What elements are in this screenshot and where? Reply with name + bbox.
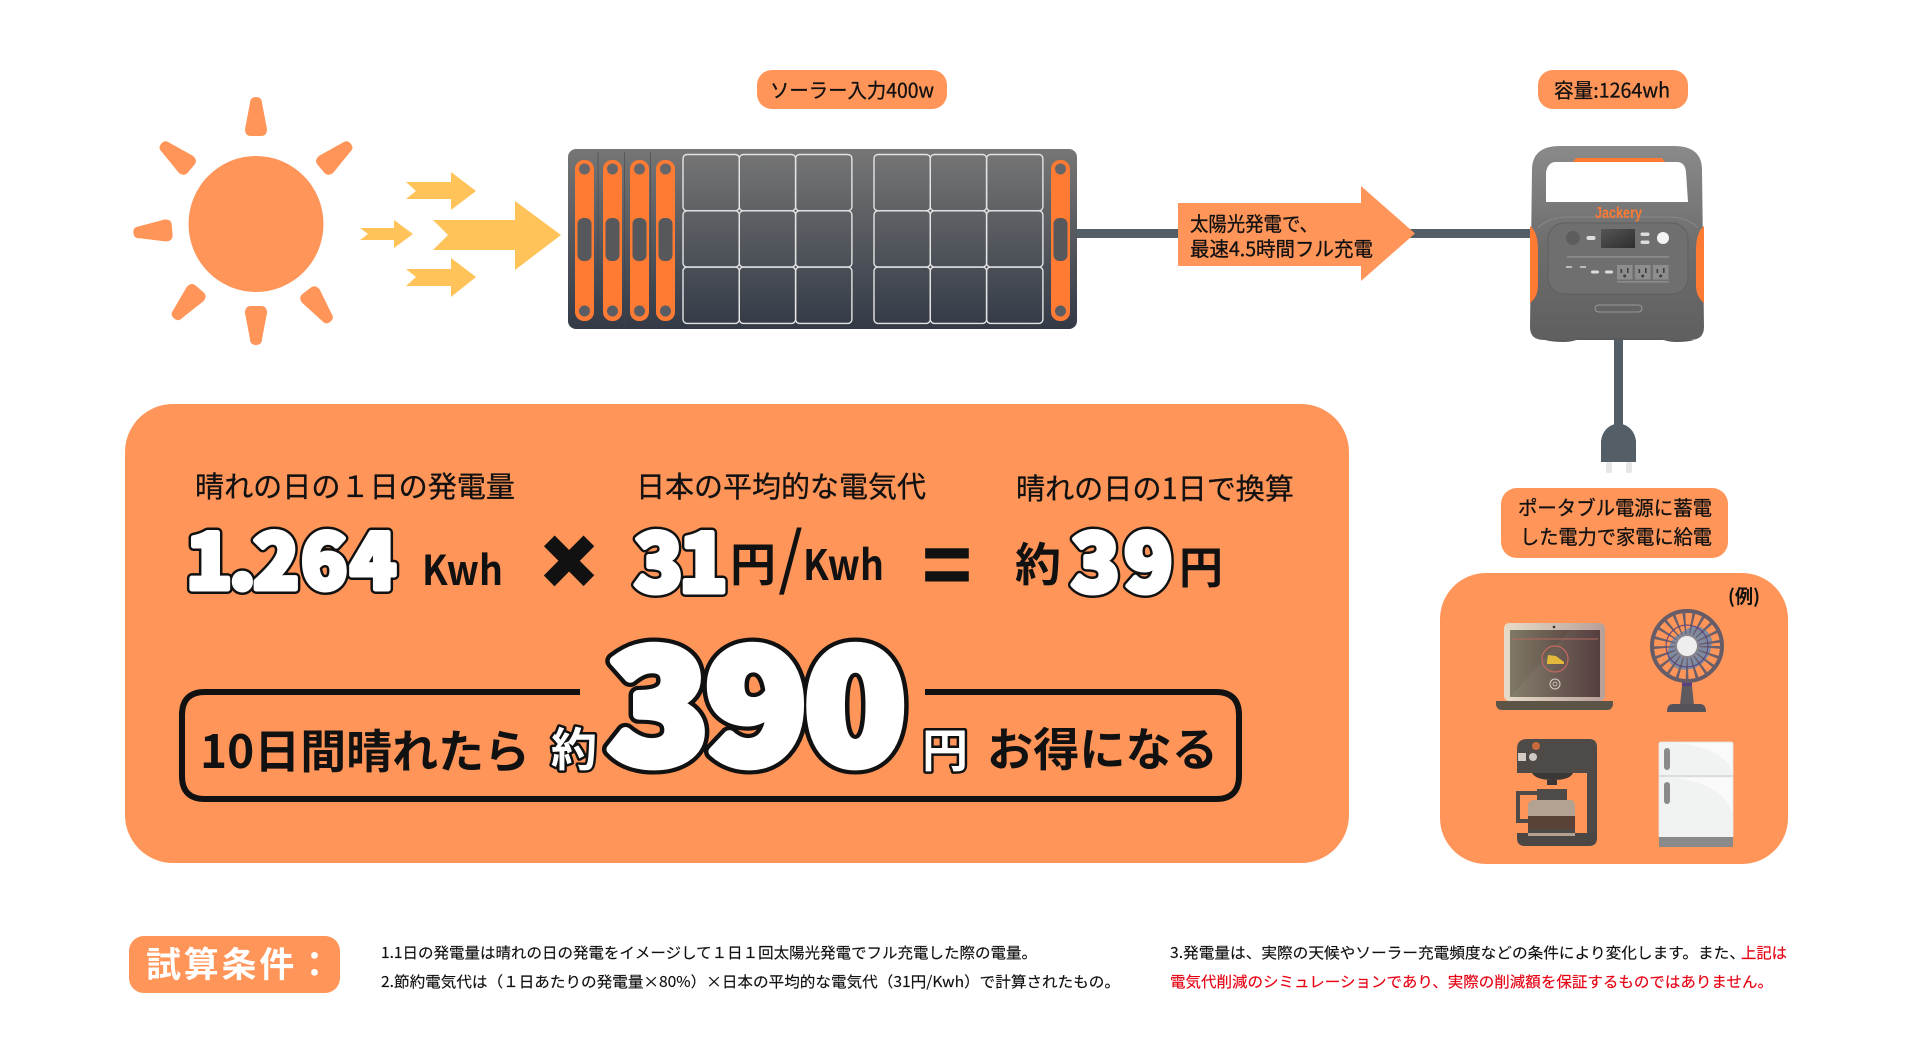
value: 31 yen per Kwh: /	[779, 503, 802, 602]
value: 31 yen per Kwh	[634, 500, 884, 616]
value: 1.264 Kwh: 4	[350, 501, 396, 611]
cord and plug	[1601, 335, 1636, 473]
result value: about 390 yen: 3	[608, 585, 708, 807]
value: about 39 yen: 約	[1015, 529, 1061, 595]
operator: equals: =	[922, 517, 972, 612]
icon: sun	[133, 97, 358, 345]
value: 1.264 Kwh: 1	[186, 501, 232, 611]
result value: about 390 yen	[551, 585, 968, 807]
operator: multiply: ×	[544, 513, 594, 607]
value: about 39 yen: 9	[1124, 500, 1173, 616]
note: example: (例)	[1728, 582, 1760, 609]
label: capacity: 容量:1264wh	[1554, 74, 1670, 104]
notes: left column	[381, 942, 1120, 992]
label: capacity	[1538, 70, 1688, 109]
result value: about 390 yen: 0	[805, 585, 905, 807]
value: 1.264 Kwh: 6	[301, 501, 347, 611]
value: 1.264 Kwh: .	[229, 501, 256, 611]
value: 1.264 Kwh: 2	[253, 501, 299, 611]
value: about 39 yen	[1015, 500, 1223, 616]
value: 1.264 Kwh: 1	[186, 501, 232, 611]
result value: about 390 yen: 約	[551, 714, 597, 780]
value: 1.264 Kwh: .	[229, 501, 256, 611]
arrow callout: charging time: 太陽光発電で、	[1190, 208, 1318, 237]
label: solar input	[757, 70, 947, 109]
icon: coffee maker	[1517, 739, 1597, 846]
label: supply to appliances	[1501, 488, 1728, 558]
panel: calculation	[125, 404, 1349, 863]
value: 31 yen per Kwh: 1	[679, 500, 728, 616]
notes: right column: 上記は	[1741, 942, 1787, 963]
label: solar input: ソーラー入力400w	[770, 74, 934, 104]
notes: left column: 1.1日の発電量は晴れの日の発電をイメージして１日１回太陽光発電でフル充電した際の電量。	[381, 942, 1037, 963]
value: 1.264 Kwh: Kwh	[422, 537, 503, 597]
label: calculation conditions: 試算条件：	[146, 937, 332, 988]
value: about 39 yen: 3	[1071, 500, 1120, 616]
result value: about 390 yen: 3	[608, 585, 708, 807]
result value: about 390 yen: 9	[706, 585, 806, 807]
value: about 39 yen: 円	[1179, 532, 1223, 596]
value: 31 yen per Kwh: Kwh	[803, 532, 884, 593]
value: 1.264 Kwh: 4	[350, 501, 396, 611]
notes: right column: 電気代削減のシミュレーションであり、実際の削減額を保証するものではありません。	[1170, 971, 1773, 992]
result value: about 390 yen: 円	[922, 715, 968, 781]
value: about 39 yen: 3	[1071, 500, 1120, 616]
icon: desk fan	[1652, 611, 1722, 712]
value: 1.264 Kwh: 6	[301, 501, 347, 611]
result box outline	[182, 692, 1239, 799]
heading: daily generation: 晴れの日の１日の発電量	[195, 464, 515, 506]
arrow callout: charging time	[1178, 186, 1415, 281]
value: 1.264 Kwh	[186, 501, 503, 611]
solar panel	[568, 149, 1077, 329]
notes: left column: 2.節約電気代は（１日あたりの発電量×80%）×日本の平均的な電気代（31円/Kwh）で計算されたもの。	[381, 971, 1120, 992]
icon: laptop	[1496, 623, 1613, 710]
label: supply to appliances: した電力で家電に給電	[1520, 521, 1712, 550]
panel: appliances	[1440, 573, 1788, 864]
cable: panel to battery	[1076, 229, 1532, 238]
result text: savings: お得になる	[987, 714, 1218, 780]
heading: one day equivalent: 晴れの日の1日で換算	[1016, 466, 1294, 508]
value: 31 yen per Kwh: 3	[634, 500, 683, 616]
label: supply to appliances: ポータブル電源に蓄電	[1518, 492, 1712, 521]
value: 31 yen per Kwh: 円	[730, 529, 776, 595]
result value: about 390 yen: 9	[706, 585, 806, 807]
result text: 10 days of sun: 10日間晴れたら	[200, 716, 530, 782]
value: 31 yen per Kwh: 1	[679, 500, 728, 616]
portable power station	[1530, 146, 1704, 342]
icon: refrigerator	[1659, 742, 1733, 847]
result value: about 390 yen: 0	[805, 585, 905, 807]
arrows: sunlight toward solar panel	[360, 172, 561, 297]
arrow callout: charging time: 最速4.5時間フル充電	[1190, 233, 1373, 262]
heading: electricity price: 日本の平均的な電気代	[636, 464, 926, 506]
notes: right column: 3.発電量は、実際の天候やソーラー充電頻度などの条件により変化します。また、	[1170, 942, 1745, 963]
notes: right column	[1170, 942, 1787, 992]
value: about 39 yen: 9	[1124, 500, 1173, 616]
value: 31 yen per Kwh: 3	[634, 500, 683, 616]
value: 1.264 Kwh: 2	[253, 501, 299, 611]
portable power station: Jackery	[1595, 205, 1642, 222]
